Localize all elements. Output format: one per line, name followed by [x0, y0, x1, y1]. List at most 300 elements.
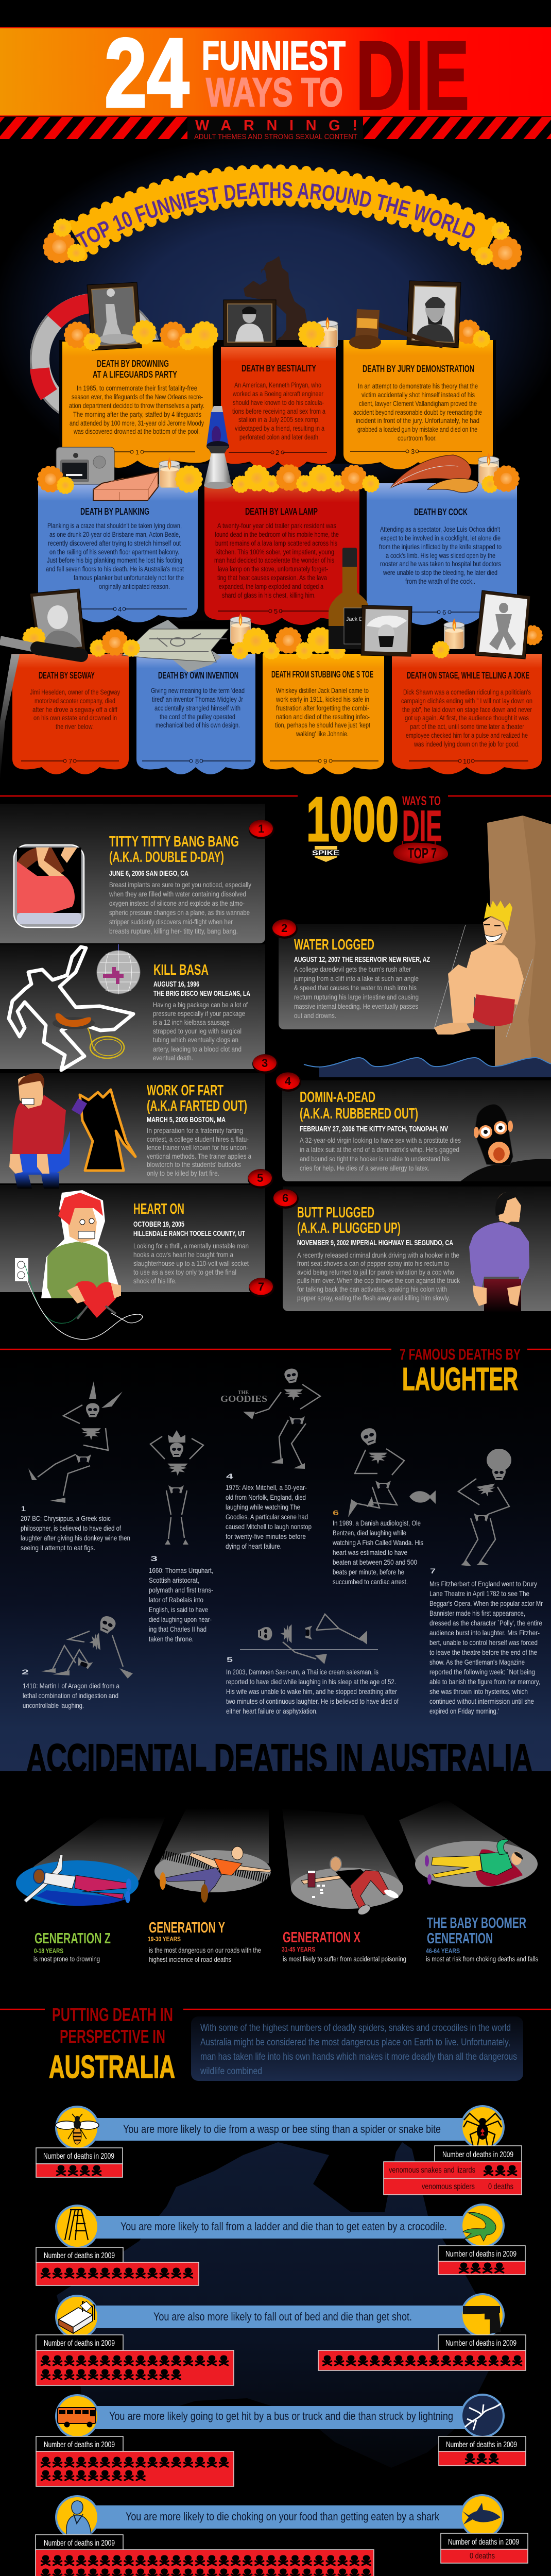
number badge: 1: [258, 822, 264, 835]
number badge: [252, 1054, 278, 1074]
death count: crocodiles: Number of deaths in 2009: [445, 2250, 516, 2259]
icon: blueprint: [122, 620, 229, 672]
panel: death by cock: [367, 483, 517, 625]
body text: An American, Kenneth Pinyan, who: [234, 381, 321, 389]
body text: as one drunk 20-year old Brisbane man, Acton Beale,: [49, 531, 180, 538]
heading: putting death in perspective: [49, 2004, 175, 2085]
laughter entry 1: philosopher, is believed to have died of: [21, 1524, 121, 1532]
date and place: HILLENDALE RANCH TOOELE COUNTY, UT: [133, 1230, 245, 1238]
spotlight beams: [33, 1800, 534, 1888]
body text: famous planker but unfortunately not for the: [74, 574, 184, 582]
number divider: [218, 607, 332, 615]
illustration: gimp mask man: [460, 1104, 551, 1181]
body text: oxygen instead of silicone and explode as the atmo-: [109, 899, 245, 907]
title: BUTT PLUGGED: [297, 1205, 374, 1221]
number divider: [229, 449, 327, 456]
body text: when they are filled with water containing dissolved: [109, 890, 246, 898]
number divider: 5: [274, 607, 278, 615]
spike logo: [312, 846, 340, 862]
panel: death by planking: [38, 484, 198, 622]
number divider: 10: [463, 757, 470, 765]
death count: lightning: Number of deaths in 2009: [446, 2441, 517, 2449]
number badge: [273, 1189, 299, 1209]
ribbon heading: top 10: [42, 164, 522, 270]
laughter entry 5: either heart failure or asphyxiation.: [226, 1707, 318, 1715]
panel backgrounds: 1000 ways stories: [0, 804, 551, 1311]
heading: DEATH BY LAVA LAMP: [245, 506, 318, 517]
body text: In an attempt to demonstrate his theory that the: [358, 382, 478, 390]
death count: buses and trucks: Number of deaths in 2009: [44, 2441, 115, 2449]
figure: baby boomer fall: [415, 1839, 538, 1887]
skeleton 4: alex mitchell and the goodies: [220, 1367, 320, 1469]
laughter entry 4: laughing while watching The: [226, 1503, 300, 1511]
body text: [30, 688, 120, 731]
laughter entry 4: 1975: Alex Mitchell, a 50-year-: [226, 1483, 307, 1492]
comparison 1: bee versus spider: [36, 2105, 522, 2195]
panel: death by lava lamp: [204, 486, 359, 625]
icon: gavel: [349, 309, 443, 349]
label: generation y: [148, 1920, 261, 1963]
skeleton 6: ole bentzen and fish: [348, 1426, 436, 1517]
skeleton 5: damnoen saen-um lying down: [240, 1614, 378, 1664]
number badge: [249, 1278, 274, 1297]
number badge: 4: [285, 1075, 291, 1088]
body text: stripper suddenly discovers mid-flight when her: [109, 918, 233, 926]
body text: accidentally strangled himself with: [154, 704, 240, 712]
body text: originally anticipated reason.: [99, 583, 170, 590]
death count: snakes and spiders: venomous snakes and lizards: [389, 2166, 475, 2175]
title banner: [0, 19, 551, 129]
heading: putting death in perspective: AUSTRALIA: [49, 2049, 175, 2085]
body text: burnt remains of a lava lamp scattered across his: [215, 539, 337, 547]
number badge: 6: [282, 1192, 288, 1205]
warning strip: [0, 117, 551, 141]
laughter entry 4: [226, 1472, 312, 1550]
body text: [147, 1126, 251, 1177]
panel: death by drowning: [62, 342, 213, 468]
body text: was discovered drowned at the bottom of the pool.: [73, 428, 200, 435]
laughter entry 5: 5: [227, 1655, 233, 1664]
title: [109, 834, 239, 866]
laughter entry 6: [332, 1509, 423, 1586]
date and place: [153, 980, 250, 998]
laughter entry 7: expired on Friday morning.': [429, 1707, 499, 1715]
body text: after he drove a segway off a cliff: [32, 706, 117, 714]
laughter entry 3: English, is said to have: [149, 1605, 208, 1614]
label: generation x: [282, 1929, 406, 1963]
body text: videotaped by a friend, resulting in a: [235, 425, 324, 432]
laughter entry 1: laughter after giving his donkey wine then: [21, 1534, 130, 1542]
label: generation z: GENERATION Z: [35, 1930, 111, 1947]
laughter entry 5: reported to have died while laughing in his sleep at the age of 52.: [226, 1677, 396, 1686]
death count: sharks: [441, 2533, 528, 2563]
body text: a cock's limb. His leg was sliced open by the: [386, 552, 495, 560]
laughter entry 7: 7: [430, 1567, 436, 1575]
icon: plank: [93, 472, 158, 500]
label: generation x: GENERATION X: [283, 1929, 360, 1946]
blue glow backdrop: [0, 134, 551, 505]
laughter entry 6: beats per minute, before he: [333, 1568, 404, 1576]
icon: pistol: [460, 2293, 505, 2337]
body text: A recently released criminal drunk driving with a hooker in the: [297, 1251, 459, 1259]
title: KILL BASA: [153, 962, 209, 978]
label: baby boomer generation: 46-64 YEARS: [426, 1947, 460, 1955]
skeleton 1: chrysippus with donkey ears: [28, 1381, 123, 1503]
heading: AT A LIFEGUARDS PARTY: [93, 369, 177, 380]
figure: generation y road death: [154, 1846, 271, 1903]
title: [147, 1082, 247, 1114]
photo frame: lifeguard: [87, 282, 142, 350]
body text: The morning after the party, staffed by 4 lifeguards: [73, 411, 201, 418]
number divider: [409, 757, 528, 765]
body text: massive internal bleeding. He eventually passes: [294, 1002, 418, 1010]
body text: ventional methods. The trainer applies a: [147, 1152, 251, 1160]
heading: DEATH FROM STUBBING ONE S TOE: [271, 669, 373, 680]
death count: buses and trucks: [36, 2436, 234, 2486]
icon: bee: [55, 2106, 99, 2150]
cliff: [487, 816, 551, 1077]
row of flowers between lamp and feathers: [234, 467, 377, 491]
body text: [109, 880, 251, 935]
body text: in a latex suit at the end of a dominatrix's whip. He's gagged: [300, 1145, 459, 1154]
body text: spheric pressure changes on a plane, as this wannabe: [109, 908, 250, 917]
laughter entry 6: succumbed to cardiac arrest.: [333, 1578, 408, 1586]
body text: rectum rupturing his large intestine and causing: [294, 993, 419, 1001]
body text: stallion in a July 2005 sex romp,: [238, 416, 320, 423]
laughter entry 7: Bannister made his first appearance,: [429, 1609, 525, 1617]
number badge: 3: [262, 1057, 268, 1070]
water: [304, 1058, 551, 1077]
heading: DEATH BY DROWNING: [97, 359, 169, 369]
skeleton 4: alex mitchell and the goodies: GOODIES: [220, 1394, 267, 1404]
panel: death on stage: [392, 654, 542, 774]
body text: worked as a Boeing aircraft engineer: [232, 390, 323, 398]
body text: hooks a cow's heart he bought from a: [133, 1250, 233, 1259]
label: generation x: 31-45 YEARS: [282, 1945, 315, 1953]
intro text box: [191, 2016, 523, 2081]
number divider: 9: [323, 757, 327, 765]
icon: lava lamp: [204, 406, 232, 489]
illustration: airplane window: [14, 845, 84, 927]
panel: death by segway: [12, 654, 129, 774]
death count: ladders: [36, 2247, 199, 2285]
panel: death by jury demonstration: [343, 340, 493, 469]
decorative candle and flowers, top row: [67, 317, 488, 348]
laughter entry 6: heart was estimated to have: [333, 1548, 407, 1556]
figure: generation x poisoning: [291, 1857, 403, 1917]
story 3: kill basa: [9, 944, 278, 1074]
laughter entry 6: In 1989, a Danish audiologist, Ole: [333, 1519, 421, 1527]
body text: lava lamp on the stove, unfortunately forget-: [218, 565, 328, 573]
heading: putting death in perspective: PUTTING DEATH IN: [52, 2004, 173, 2025]
icon: bed: [55, 2295, 99, 2339]
body text: [275, 687, 370, 738]
body text: only to be killed by fart fire.: [147, 1169, 219, 1177]
title: DOMIN-A-DEAD: [300, 1089, 375, 1106]
heading: DEATH BY BESTIALITY: [242, 363, 316, 374]
label: generation y: highest incidence of road deaths: [149, 1955, 231, 1963]
title: (A.K.A. RUBBERED OUT): [300, 1106, 418, 1122]
laughter entry 7: reported the following week: `Not being: [429, 1668, 535, 1676]
death count: wasps and bees: Number of deaths in 2009: [43, 2152, 114, 2161]
body text: Whiskey distiller Jack Daniel came to: [276, 687, 369, 694]
heading: 1000 ways to die: 1000: [306, 784, 399, 854]
warning word: WARNING!: [195, 117, 357, 134]
flowers and candle, planking side: [40, 457, 200, 492]
number badge: [249, 820, 274, 839]
number divider: [81, 605, 187, 613]
date and place: THE BRIG DISCO NEW ORLEANS, LA: [153, 990, 250, 998]
heading: DEATH BY JURY DEMONSTRATION: [363, 364, 474, 374]
heading: DEATH BY OWN INVENTION: [158, 670, 238, 681]
laughter entry 3: 1660: Thomas Urquhart,: [149, 1566, 213, 1574]
body text: [300, 1136, 461, 1172]
body text: part of the act, until some time later a theater: [410, 723, 524, 731]
body text: found dead in the bedroom of his mobile home, the: [215, 531, 339, 538]
laughter entry 7: Lane Theatre in April 1782 to see The: [429, 1589, 529, 1598]
number badge: [276, 1072, 301, 1092]
laughter entry 1: 1: [21, 1504, 26, 1513]
body text: [153, 1001, 248, 1062]
body text: victim accidentally shot himself instead of his: [361, 391, 475, 399]
death count: choking: Number of deaths in 2009: [44, 2539, 115, 2548]
body text: got up again. At first, the audience thought it was: [405, 714, 529, 722]
story 5: work of fart: [9, 1073, 273, 1189]
number divider: 2: [276, 449, 279, 456]
death count: sharks: 0 deaths: [470, 2552, 495, 2561]
body text: blowtorch to the students' buttocks: [147, 1160, 241, 1168]
body text: front seat shoves a can of pepper spray into his rectum to: [297, 1259, 449, 1267]
icon: crocodile: [460, 2204, 505, 2248]
heading: 7 famous deaths by laughter: [400, 1345, 521, 1397]
date and place: FEBRUARY 27, 2006 THE KITTY PATCH, TONOPAH, NV: [300, 1125, 448, 1133]
body text: pepper spray, eating the flesh away and killing him slowly.: [297, 1294, 450, 1302]
illustration: chalk outline, disco ball, sausage: [9, 944, 140, 1070]
death count: snakes and spiders: venomous spiders: [422, 2182, 475, 2191]
label: baby boomer generation: GENERATION: [427, 1930, 493, 1947]
story 7: heart on: [15, 1190, 274, 1340]
laughter entry 7: she was thrown into hysterics, which: [429, 1687, 528, 1696]
body text: incident in front of the jury. Unfortunately, he had: [356, 417, 479, 425]
body text: [232, 381, 325, 441]
death count: snakes and spiders: Number of deaths in 2009: [442, 2150, 513, 2159]
date and place: JUNE 6, 2006 SAN DIEGO, CA: [109, 870, 188, 878]
claim text: You are more likely to fall from a ladder and die than to get eaten by a crocodile.: [120, 2220, 447, 2233]
laughter entry 6: watching A Fish Called Wanda. His: [332, 1538, 423, 1547]
death count: guns: [318, 2335, 526, 2370]
laughter entry 5: two minutes of continuous laughter. He is believed to have died of: [226, 1697, 399, 1705]
body text: ation department decided to throw themselves a party.: [69, 402, 204, 410]
laughter entry 3: [149, 1554, 213, 1643]
label: baby boomer generation: [426, 1915, 538, 1963]
laughter entry 3: ing that Charles II had: [149, 1625, 206, 1633]
claim text: You are also more likely to fall out of bed and die than get shot.: [153, 2310, 412, 2323]
label: generation y: 19-30 YEARS: [148, 1935, 181, 1943]
icon: ladder: [55, 2205, 99, 2249]
body text: In preparation for a fraternity farting: [147, 1126, 243, 1134]
laughter entry 4: for twenty-five minutes before: [226, 1532, 306, 1540]
illustration: man and flaming figure: [9, 1073, 135, 1189]
table backing: [36, 340, 519, 621]
date and place: [133, 1221, 245, 1238]
laughter entry 4: 4: [226, 1472, 233, 1480]
label: generation z: 0-18 YEARS: [34, 1947, 63, 1955]
laughter entry 2: 1410: Martin I of Aragon died from a: [23, 1682, 119, 1690]
laughter entry 3: taken the throne.: [149, 1635, 194, 1643]
story 4: domin-a-dead: [276, 1072, 551, 1181]
laughter entry 5: In 2003, Damnoen Saen-um, a Thai ice cream salesman, is: [226, 1668, 378, 1676]
body text: shock of his life.: [133, 1277, 177, 1285]
top 7 blob: [393, 841, 448, 864]
body text: [214, 522, 339, 599]
laughter entry 2: uncontrollable laughing.: [23, 1701, 84, 1709]
ribbon heading: top 10: TOP 10 FUNNIEST DEATHS AROUND THE WORLD: [75, 182, 475, 247]
title: funniest: FUNNIEST: [202, 32, 346, 78]
date and place: MARCH 5, 2005 BOSTON, MA: [147, 1116, 226, 1124]
label: generation y: GENERATION Y: [149, 1920, 225, 1936]
title: TITTY TITTY BANG BANG: [109, 834, 239, 850]
section rule: perspective: [0, 2009, 551, 2010]
label: generation x: is most likely to suffer from accidental poisoning: [283, 1955, 406, 1963]
death count: lightning: [439, 2436, 526, 2466]
body text: [401, 688, 532, 748]
number badge: 7: [258, 1280, 264, 1293]
title: (A.K.A. DOUBLE D-DAY): [109, 849, 224, 866]
laughter entry 4: Goodies. A particular scene had: [226, 1513, 308, 1521]
number divider: [350, 448, 482, 455]
body text: should have known to do his calcula-: [233, 399, 324, 406]
title: HEART ON: [133, 1201, 184, 1217]
body text: In 1985, to commemorate their first fatality-free: [77, 384, 197, 392]
photo frame: vallandigham: [407, 281, 461, 348]
illustration: man clutching behind: [469, 1192, 529, 1313]
body text: avoid being returned to jail for parole violation by a cop who: [297, 1268, 454, 1276]
body text: ting that heat causes expansion. As the lava: [217, 574, 327, 582]
title: (A.K.A FARTED OUT): [147, 1098, 247, 1114]
section rule: 1000 ways: [0, 795, 551, 796]
label: generation z: [33, 1930, 111, 1963]
number divider: 1: [135, 448, 139, 456]
icon: horse statue: [244, 256, 307, 345]
candle and flower, stage side: [434, 618, 540, 656]
body text: from the wrath of the cock..: [405, 578, 475, 585]
number divider: [114, 448, 195, 456]
icon: feathers: [390, 455, 478, 493]
heading: 1000 ways to die: WAYS TO: [402, 794, 441, 808]
laughter entry 4: old from Norfolk, England, died: [226, 1493, 306, 1501]
title: ways to: WAYS TO: [206, 69, 343, 115]
title: WATER LOGGED: [294, 937, 374, 953]
number badge: 2: [281, 922, 287, 935]
laughter entry 2: lethal combination of indigestion and: [23, 1691, 118, 1700]
laughter entry 5: His wife was unable to wake him, and he stopped breathing after: [226, 1687, 397, 1696]
death count: beds: [36, 2335, 234, 2385]
panel: death by own invention: [136, 654, 255, 774]
label: generation z: is most prone to drowning: [33, 1955, 100, 1963]
number divider: 7: [68, 757, 72, 765]
body text: [69, 384, 204, 435]
body text: the cord of the pulley operated: [160, 713, 235, 721]
date and place: AUGUST 16, 1996: [153, 980, 199, 989]
heading: putting death in perspective: PERSPECTIVE IN: [60, 2026, 165, 2047]
map of australia silhouette: [57, 2142, 489, 2468]
laughter entry 3: 3: [150, 1554, 158, 1563]
body text: to use as a sex toy only to get the final: [133, 1268, 236, 1276]
death count: guns: Number of deaths in 2009: [445, 2339, 516, 2348]
body text: shard of glass in his chest, killing him.: [222, 591, 316, 599]
story 6: butt plugged: [273, 1189, 529, 1313]
body text: pressure especially if your package: [153, 1009, 245, 1018]
icon: lightning: [460, 2394, 505, 2438]
laughter entry 1: seeing it attempt to eat figs.: [21, 1544, 95, 1552]
body text: tubing which eventually clogs an: [153, 1036, 238, 1044]
illustration: grinning man on ledge: [434, 901, 532, 1037]
spike logo: SPIKE: [312, 849, 339, 857]
title: die: DIE: [356, 21, 469, 129]
laughter entry 2: [22, 1668, 119, 1709]
body text: Giving new meaning to the term 'dead: [151, 687, 245, 694]
body text: motorized scooter company, died: [35, 697, 115, 705]
laughter entry 1: [21, 1504, 130, 1552]
title: [300, 1089, 418, 1122]
icon: spider: [460, 2105, 505, 2149]
claim text: You are more likely going to get hit by a bus or truck and die than struck by lightning: [109, 2410, 453, 2422]
body text: from the injuries inflicted by the knife strapped to: [379, 543, 502, 551]
body text: client, lawyer Clement Vallandigham proved the: [359, 400, 477, 408]
body text: expanded, the lamp exploded and lodged a: [219, 583, 323, 590]
body text: and fell seven floors to his death. He is Australia's most: [46, 565, 184, 573]
number badge: [272, 919, 298, 939]
skeleton 2: martin of aragon: [41, 1614, 133, 1679]
death count: ladders: Number of deaths in 2009: [44, 2251, 115, 2260]
death count: wasps and bees: [36, 2148, 123, 2177]
body text: accident beyond reasonable doubt by reenacting the: [353, 409, 482, 416]
icon: segway handle: [0, 640, 81, 781]
photo frame: dick shawn: [475, 590, 530, 659]
body text: A twenty-four year old trailer park resident was: [217, 522, 336, 530]
number divider: 6: [442, 608, 446, 616]
body text: expect to be involved in a cockfight, let alone die: [381, 534, 501, 542]
body text: A 32-year-old virgin looking to have sex with a prostitute dies: [300, 1136, 461, 1144]
body text: kitchen. This 100% sober, yet impatient, young: [216, 548, 334, 556]
body text: were unable to stop the bleeding, he later died: [383, 569, 497, 577]
laughter entry 7: [429, 1567, 543, 1715]
body text: tions before receiving anal sex from a: [232, 408, 325, 415]
claim text: You are more likely to die choking on your food than getting eaten by a shark: [126, 2510, 440, 2523]
laughter entry 4: caused Mitchell to laugh nonstop: [226, 1522, 312, 1531]
death count: sharks: Number of deaths in 2009: [448, 2538, 519, 2547]
number divider: [142, 757, 251, 765]
number divider: 3: [411, 448, 415, 455]
body text: contest, a college student hires a flatu-: [147, 1135, 249, 1143]
body text: is a 12 inch kielbasa sausage: [153, 1018, 230, 1026]
heading: [93, 359, 177, 380]
icon: lifebuoy: [31, 294, 161, 424]
body text: [297, 1251, 460, 1302]
section rule: laughter: [0, 1349, 551, 1350]
label: generation y: is the most dangerous on our roads with the: [149, 1946, 261, 1954]
heading: DEATH BY PLANKING: [80, 506, 149, 517]
icon: whiskey bottle: [329, 548, 369, 649]
icon: choking man: [55, 2495, 99, 2539]
date and place: OCTOBER 19, 2005: [133, 1221, 184, 1229]
body text: lence trainer well known for his uncon-: [147, 1143, 248, 1151]
death count: beds: Number of deaths in 2009: [44, 2339, 115, 2348]
body text: Jimi Heselden, owner of the Segway: [30, 688, 120, 696]
body text: breasts rupture, killing her- titty titty, bang bang.: [109, 927, 238, 935]
icon: shark: [460, 2494, 504, 2538]
death count: choking: [36, 2535, 374, 2576]
